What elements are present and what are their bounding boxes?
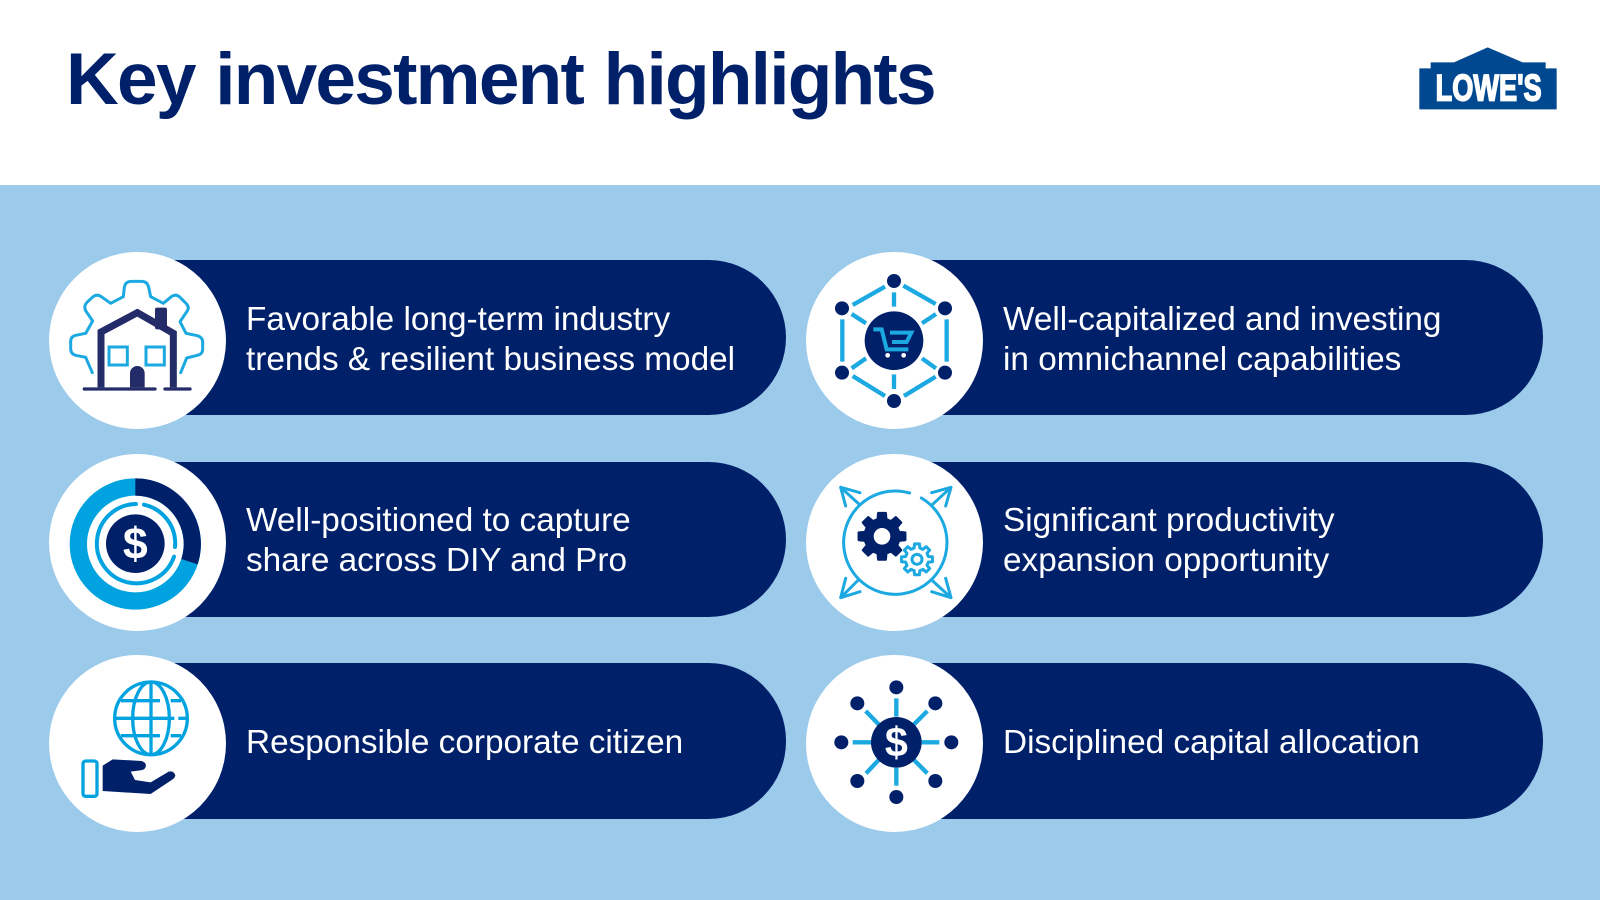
text: productivity: expansion opportunity [1003,542,1329,578]
icon: globe and hand [49,655,226,832]
pill: capital allocation [866,663,1543,819]
logo: Lowe's [1419,47,1557,110]
text: share capture: share across DIY and Pro [246,542,627,578]
icon: house in gear [49,252,226,429]
text: omnichannel [1003,300,1441,378]
header band background [0,185,1600,900]
card: capital allocation [806,655,1543,832]
text: industry trends [246,300,735,378]
icon: cart network [806,252,983,429]
pill: share capture [109,462,786,616]
card: industry trends [49,252,786,429]
text: productivity: Significant productivity [1003,502,1335,538]
text: industry trends: Favorable long-term industry [246,300,670,338]
text: capital allocation: Disciplined capital allocation [1003,724,1420,760]
text: share capture: Well-positioned to capture [246,502,631,538]
card: omnichannel [806,252,1543,429]
text: corporate citizen: Responsible corporate citizen [246,724,683,760]
icon: donut with dollar [49,454,226,630]
pill: productivity [866,462,1543,616]
icon: dollar hub [806,655,983,832]
icon: gears and arrows [806,454,983,630]
text: omnichannel: in omnichannel capabilities [1003,340,1401,378]
icon: donut with dollar: $ [123,520,148,569]
pill: corporate citizen [109,663,786,819]
text: productivity [1003,502,1335,578]
card: corporate citizen [49,655,786,832]
text: industry trends: trends & resilient business model [246,340,735,378]
icon: dollar hub: $ [885,720,908,766]
card: productivity [806,454,1543,631]
text: share capture [246,502,631,578]
title: Key investment highlights [66,39,935,120]
card: share capture [49,454,786,631]
pill: omnichannel [866,260,1543,415]
logo: Lowe's: LOWE'S [1436,67,1542,109]
pill: industry trends [109,260,786,415]
text: omnichannel: Well-capitalized and investing [1003,300,1441,338]
